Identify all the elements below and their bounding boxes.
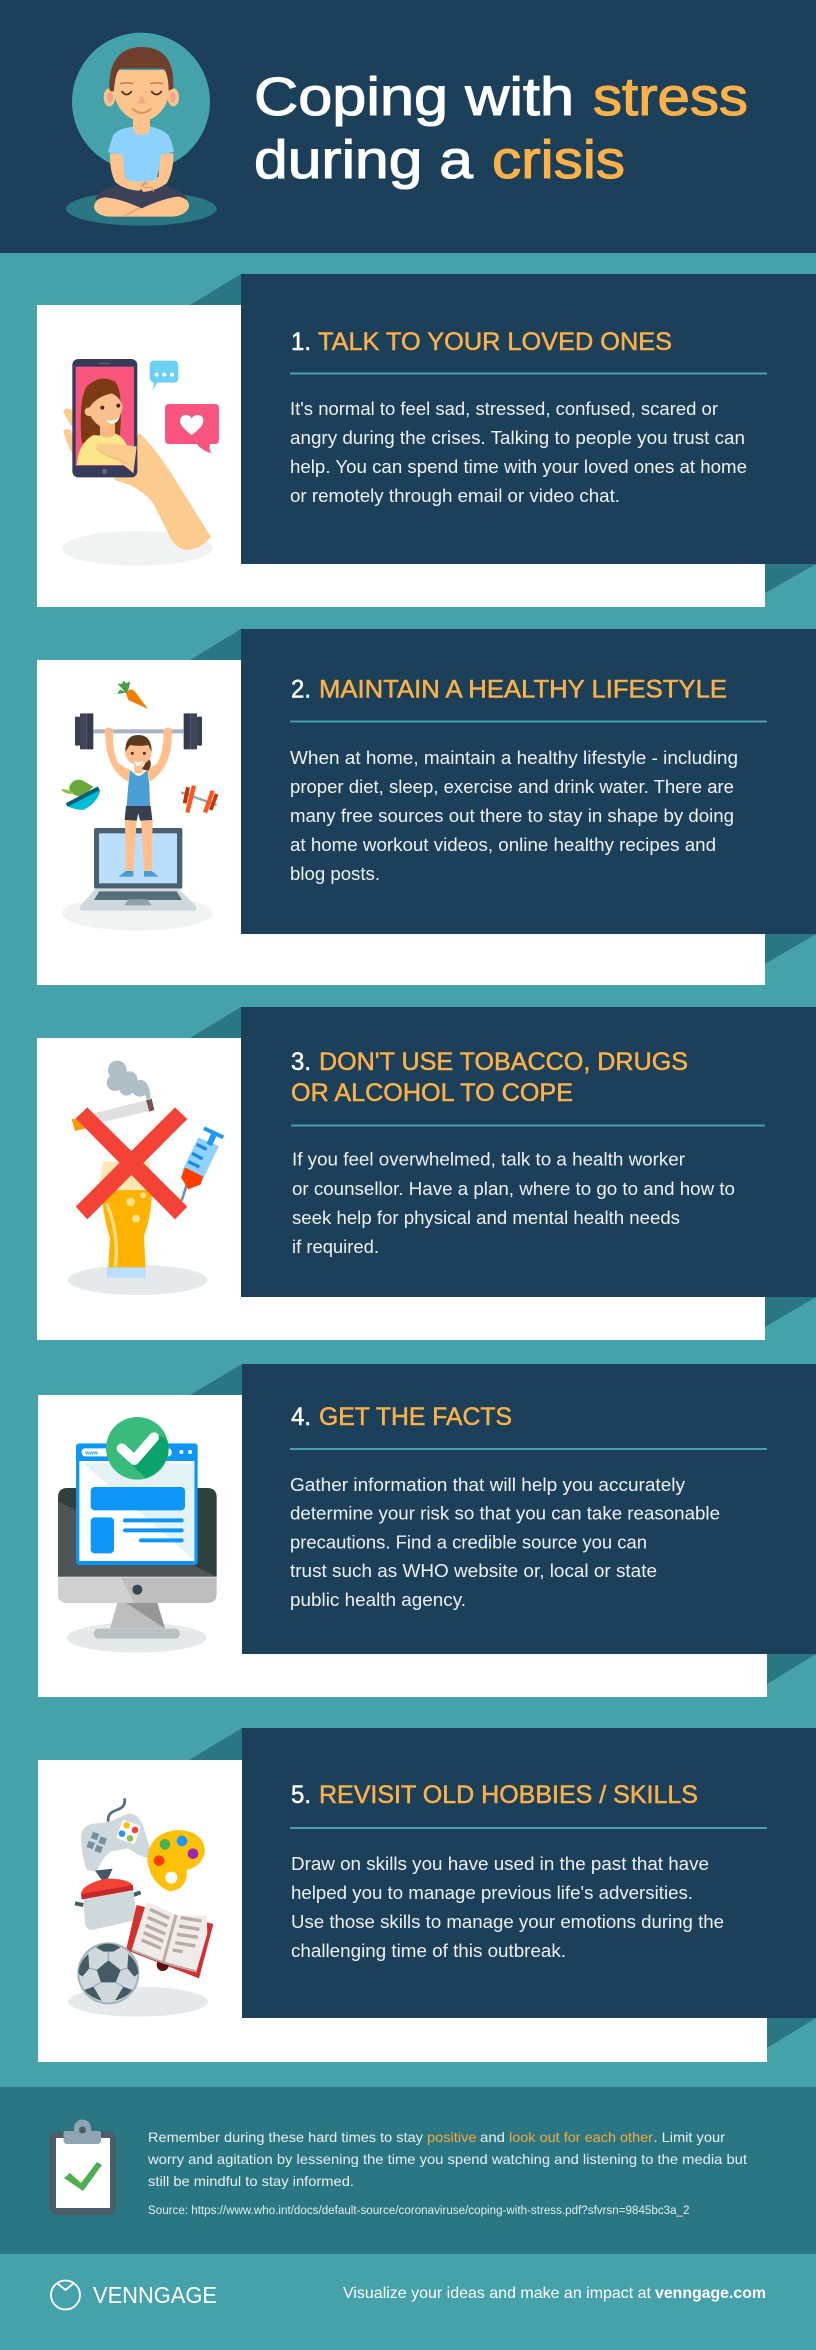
icon: meditating man [66,33,217,226]
reminder text: look out for each other [509,2129,653,2145]
title [254,67,748,190]
callout: reminder band [0,2087,816,2254]
heading: TALK TO YOUR LOVED ONES [318,328,672,356]
body text: helped you to manage previous life's adversities. [291,1883,693,1903]
tagline: Visualize your ideas and make an impact at [343,2285,652,2302]
icon: crossed out cigarette, beer and syringe [68,1061,223,1295]
body text: at home workout videos, online healthy recipes and [290,835,716,855]
body text: help. You can spend time with your loved ones at home [290,457,747,477]
icon: clipboard with check [49,2120,116,2215]
body text: seek help for physical and mental health needs [292,1208,680,1228]
heading: 5. [291,1781,311,1809]
heading: 4. [291,1403,311,1431]
body text: challenging time of this outbreak. [291,1941,566,1961]
body text: many free sources out there to stay in shape by doing [290,806,734,826]
body text [291,1854,724,1961]
body text: Gather information that will help you accurately [290,1475,685,1495]
title: Coping with [254,67,574,127]
body text [292,1150,735,1257]
reminder text: still be mindful to stay informed. [148,2173,354,2189]
body text: public health agency. [290,1590,466,1610]
title: during a [254,130,474,190]
icon: monitor with verified web page [58,1417,217,1653]
icon: hobbies controller, palette, pot, book and ball [68,1798,213,2017]
heading: REVISIT OLD HOBBIES / SKILLS [319,1781,698,1809]
body text: It's normal to feel sad, stressed, confused, scared or [290,399,718,419]
panel: 5 revisit old hobbies [38,1728,816,2062]
body text: or counsellor. Have a plan, where to go to and how to [292,1179,735,1199]
reminder text: and [480,2129,505,2145]
body text: angry during the crises. Talking to people you trust can [290,428,745,448]
body text: If you feel overwhelmed, talk to a health worker [292,1150,685,1170]
panel: 3 don't use tobacco, drugs or alcohol [37,1007,816,1340]
body text: precautions. Find a credible source you can [290,1532,647,1552]
logo: venngage: VENNGAGE [93,2282,217,2308]
icon: hand holding phone [62,359,219,566]
heading: MAINTAIN A HEALTHY LIFESTYLE [319,676,727,704]
body text: Use those skills to manage your emotions during the [291,1912,724,1932]
body text [290,1475,720,1610]
title: crisis [492,130,625,190]
source: Source: https://www.who.int/docs/default-source/coronaviruse/coping-with-stress.pdf?sfvrsn=9845bc3a_2 [148,2205,690,2217]
header band [0,0,816,253]
body text [290,399,747,506]
body text [290,748,738,884]
footer [51,2280,766,2310]
tagline: venngage.com [655,2285,766,2302]
icon: monitor with verified web page: www [84,1450,99,1456]
body text: proper diet, sleep, exercise and drink water. There are [290,777,734,797]
heading: OR ALCOHOL TO COPE [291,1079,573,1107]
reminder text: positive [427,2129,477,2145]
body text: When at home, maintain a healthy lifestyle - including [290,748,738,768]
heading: 3. [291,1048,311,1076]
reminder text: . Limit your [654,2129,725,2145]
body text: trust such as WHO website or, local or state [290,1561,657,1581]
body text: blog posts. [290,864,380,884]
heading: DON'T USE TOBACCO, DRUGS [319,1048,688,1076]
reminder text [147,2129,747,2189]
reminder text: worry and agitation by lessening the time you spend watching and listening to the media but [147,2151,747,2167]
body text: determine your risk so that you can take reasonable [290,1504,720,1524]
heading: 1. [291,328,311,356]
panel: 4 get the facts [38,1364,816,1697]
panel: 2 maintain a healthy lifestyle [37,629,816,985]
body text: or remotely through email or video chat. [290,486,620,506]
heading: GET THE FACTS [319,1403,512,1431]
heading [291,1048,688,1107]
title: stress [593,67,748,127]
icon: woman lifting weights on laptop [61,681,217,931]
logo: venngage [51,2280,217,2310]
body text: if required. [292,1237,379,1257]
panel: 1 talk to your loved ones [37,274,816,607]
reminder text: Remember during these hard times to stay [148,2129,423,2145]
heading: 2. [291,676,311,704]
body text: Draw on skills you have used in the past that have [291,1854,709,1874]
